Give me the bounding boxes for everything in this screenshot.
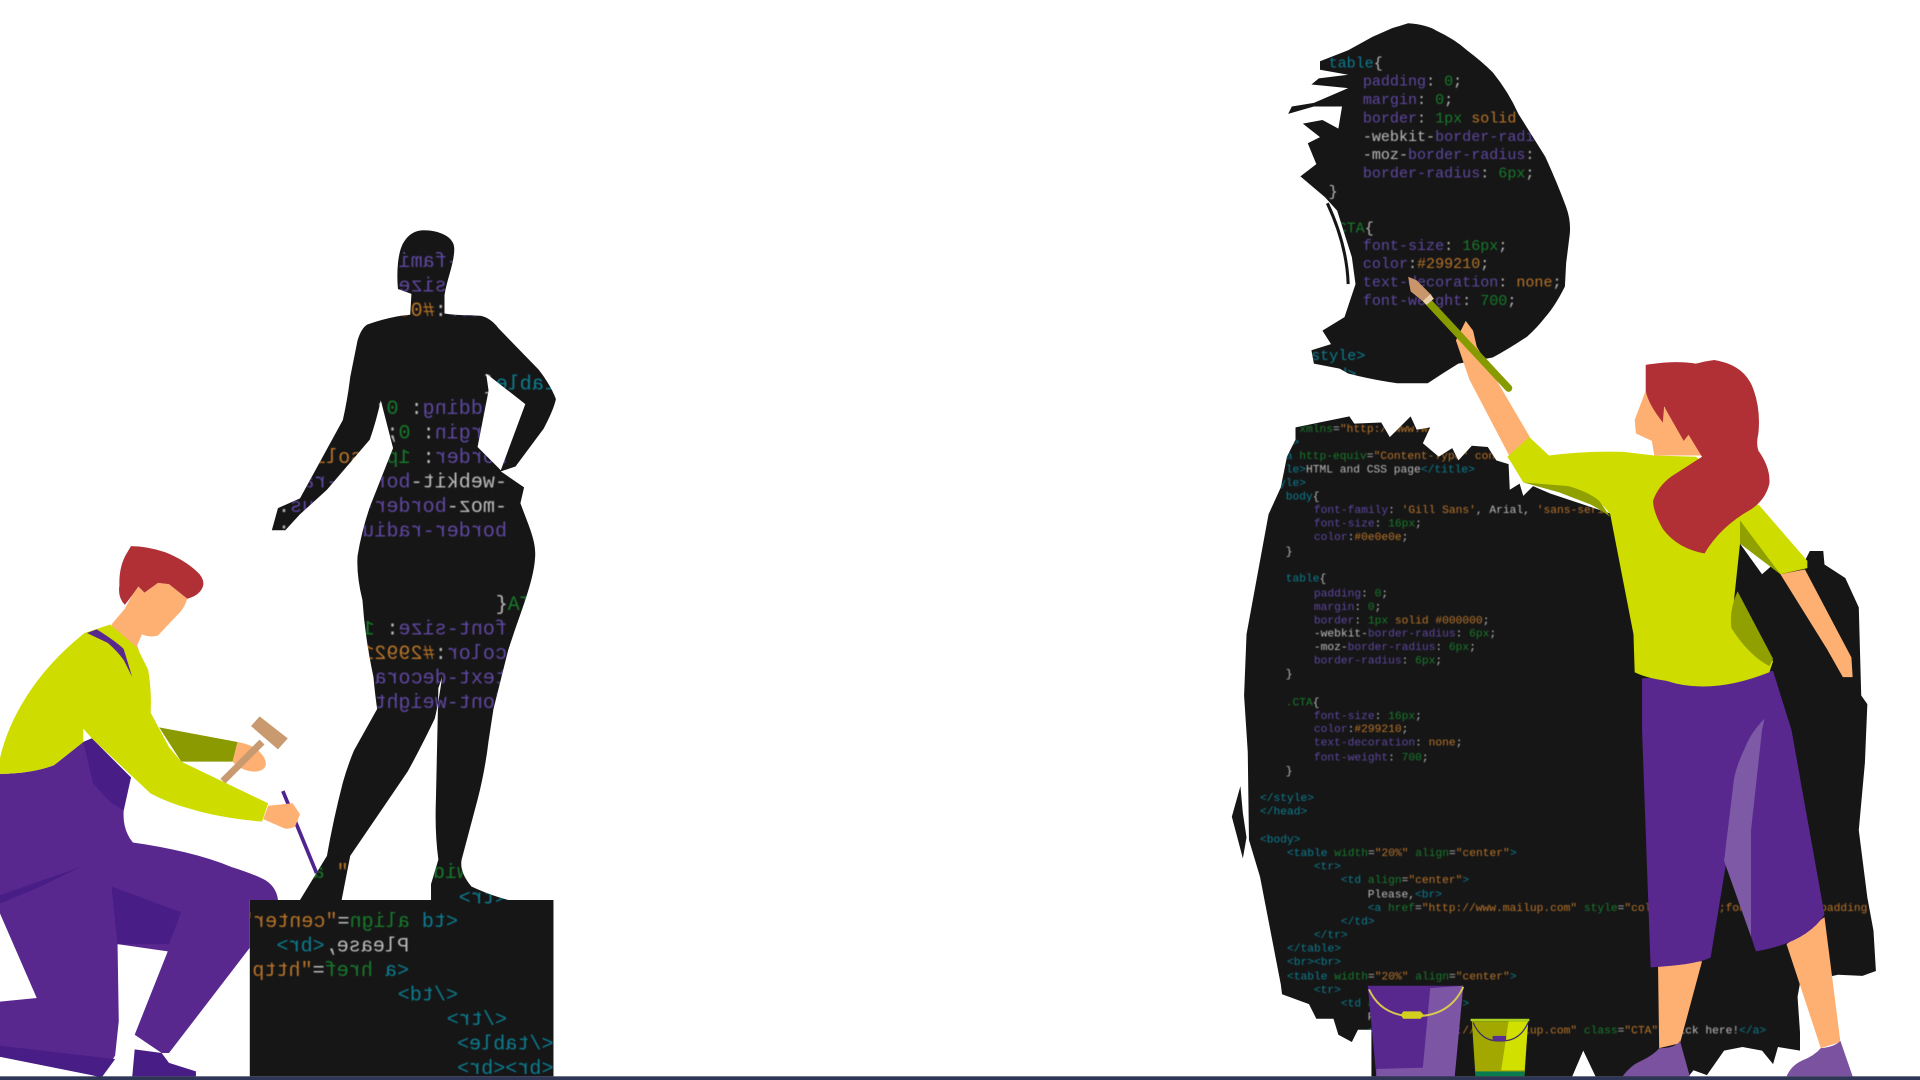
code text in lower paint: <table width="20%" align="center"> — [1287, 848, 1517, 860]
code text in lower paint: <td align="center"> — [1341, 875, 1469, 887]
code text in lower paint: Please,<br> — [1368, 1012, 1442, 1024]
code text in lower paint: } — [1286, 669, 1292, 681]
figure: sculptor man with hammer and chisel — [0, 546, 317, 1078]
code text in lower paint: <a href="http://www.mailup.com" class="CTA">Click here!</a> — [1368, 1025, 1766, 1037]
legs — [1658, 961, 1702, 1048]
mirrored code text on statue and plinth: font-size: 16px; — [314, 275, 507, 298]
neck and face — [111, 583, 187, 671]
code text in upper stroke: </head> — [1293, 365, 1356, 383]
code text in lower paint: <table width="20%" align="center"> — [1287, 972, 1517, 984]
code text in upper stroke: -moz-border-radius: 6px; — [1363, 146, 1580, 164]
lower paint area — [1244, 416, 1876, 1076]
mirrored code text on statue and plinth: text-decoration: none; — [242, 667, 507, 690]
mirrored code text on statue and plinth: font-size: 16px; — [314, 618, 507, 641]
overalls — [0, 738, 278, 1078]
code text in upper stroke: font-size: 16px; — [1363, 237, 1507, 255]
code text in upper stroke: border: 1px solid #000000; — [1363, 109, 1598, 127]
code text in upper stroke: border-radius: 6px; — [1363, 165, 1534, 183]
code text in lower paint: </table> — [1287, 943, 1341, 955]
neck and face — [1635, 391, 1702, 456]
paint drip left — [1232, 786, 1247, 858]
code text in upper stroke: text-decoration: none; — [1363, 274, 1562, 292]
panel: code statue on plinth — [250, 230, 556, 1076]
shoes — [1622, 1041, 1690, 1076]
code text in lower paint: font-size: 16px; — [1314, 711, 1422, 723]
hair — [1646, 360, 1769, 553]
mirrored code text on statue and plinth: .CTA{ — [496, 594, 556, 617]
code text in lower paint: color:#0e0e0e; — [1314, 532, 1408, 544]
shoe — [132, 1049, 196, 1076]
code text in lower paint: table{ — [1286, 574, 1326, 586]
code text in lower paint: <html xmlns="http://www.w3.org/1999/xhtml"> — [1259, 424, 1549, 436]
code text in lower paint: </tr> — [1314, 930, 1348, 942]
mirrored code text on statue and plinth: color:#299210; — [338, 643, 507, 666]
code text in lower paint: body{ — [1286, 492, 1319, 504]
code text in lower paint — [1259, 424, 1920, 1037]
mirrored code text on statue and plinth: <td align="center"> — [229, 911, 458, 934]
code text in lower paint: <title>HTML and CSS page</title> — [1259, 465, 1475, 477]
overalls shading — [0, 738, 181, 1078]
shirt — [1507, 437, 1807, 687]
skirt — [1642, 671, 1824, 967]
code text in lower paint: border: 1px solid #000000; — [1314, 615, 1489, 627]
mirrored code text on statue and plinth: <table width="20%" align="center"> — [144, 862, 553, 885]
hair — [119, 546, 203, 605]
mirrored code text on statue and plinth: border-radius: 6px; — [278, 520, 507, 543]
code text in lower paint: font-family: 'Gill Sans', Arial, 'sans-serif'; — [1314, 505, 1624, 517]
mirrored code text on statue and plinth: table{ — [484, 373, 556, 396]
mirrored code text on statue and plinth: <a href="http://www.mailup.com" — [35, 960, 409, 983]
raised arm — [1456, 321, 1531, 457]
code text in lower paint: -webkit-border-radius: 6px; — [1314, 629, 1496, 641]
icon: paint brush — [1408, 277, 1509, 388]
code text in lower paint: <body> — [1260, 834, 1301, 846]
icon: purple bucket — [1368, 986, 1463, 1076]
code text in lower paint: margin: 0; — [1314, 602, 1381, 614]
code text in upper stroke — [1312, 56, 1559, 376]
back arm — [159, 727, 238, 762]
code text in upper stroke: padding: 0; — [1363, 73, 1462, 91]
mirrored code text on statue and plinth: border: 1px solid #000000; — [194, 447, 507, 470]
code text in upper stroke: } — [1329, 183, 1338, 201]
code text in upper stroke: table{ — [1329, 54, 1383, 72]
mirrored code text on statue and plinth: font-weight: 700; — [302, 692, 507, 715]
icon: lime bucket — [1471, 1019, 1529, 1076]
bottom bar — [0, 1076, 1920, 1080]
icon: hammer — [220, 716, 288, 784]
code text in lower paint: <meta http-equiv="Content-Type" content — [1259, 451, 1522, 463]
mirrored code text on statue and plinth: </td> — [398, 984, 458, 1007]
paint sliver — [1327, 203, 1348, 284]
shirt — [0, 624, 268, 822]
panel: painted code wall — [1232, 23, 1920, 1076]
code text in lower paint: color:#299210; — [1314, 724, 1408, 736]
code text in upper stroke: .CTA{ — [1329, 220, 1374, 238]
code text in lower paint: border-radius: 6px; — [1314, 656, 1442, 668]
figure: painter woman — [1408, 277, 1853, 1076]
mirrored code text on statue and plinth: padding: 0; — [374, 398, 507, 421]
mirrored code text on statue and plinth: color:#0e0e0e; — [338, 300, 507, 323]
code text in lower paint: </style> — [1260, 793, 1314, 805]
code text in lower paint: font-size: 16px; — [1314, 519, 1422, 531]
code text in upper stroke: -webkit-border-radius: 6px; — [1363, 128, 1607, 146]
code text in upper stroke: margin: 0; — [1363, 91, 1453, 109]
code text in lower paint: </head> — [1260, 806, 1308, 818]
shirt shadows — [1523, 482, 1780, 666]
mirrored code text on statue and plinth: -moz-border-radius: 6px; — [218, 496, 507, 519]
code text in upper stroke: font-weight: 700; — [1363, 292, 1516, 310]
code text in lower paint: font-weight: 700; — [1314, 752, 1429, 764]
mirrored code text on statue and plinth: </table> — [457, 1033, 553, 1056]
back hand — [233, 742, 266, 772]
code text in lower paint: Please,<br> — [1368, 890, 1442, 902]
mirrored code text on statue and plinth: margin: 0; — [386, 422, 507, 445]
code text in lower paint: <tr> — [1314, 861, 1341, 873]
mirrored code text on statue and plinth: font-family: 'Gill Sans' — [218, 251, 507, 274]
statue silhouette — [272, 230, 556, 900]
code text in lower paint: -moz-border-radius: 6px; — [1314, 642, 1476, 654]
skirt highlight — [1724, 719, 1764, 937]
code text in lower paint: <br><br> — [1287, 957, 1341, 969]
code text in lower paint: </td> — [1341, 916, 1375, 928]
mirrored code text on statue and plinth: </tr> — [447, 1009, 507, 1032]
code text in upper stroke: color:#299210; — [1363, 255, 1489, 273]
plinth block — [250, 900, 553, 1076]
code text in upper stroke: </style> — [1293, 347, 1365, 365]
mirrored code text on statue and plinth — [250, 251, 553, 1075]
code text in lower paint: } — [1286, 766, 1292, 778]
code text in lower paint: .CTA{ — [1286, 697, 1319, 709]
upper paint stroke — [1288, 23, 1570, 383]
mirrored code text on statue and plinth: Please,<br> — [276, 935, 409, 958]
overall strap — [87, 629, 132, 677]
code text in lower paint: <tr> — [1314, 985, 1341, 997]
code text in lower paint: padding: 0; — [1314, 588, 1388, 600]
code text in lower paint: text-decoration: none; — [1314, 738, 1462, 750]
code text in lower paint: } — [1286, 547, 1292, 559]
chisel — [283, 791, 317, 873]
code text in lower paint: <td align="center"> — [1341, 999, 1469, 1011]
right arm — [1780, 569, 1853, 677]
front hand — [263, 803, 300, 829]
code text in lower paint: <style> — [1259, 478, 1306, 490]
mirrored code text on statue and plinth: -webkit-border-radius: 6px; — [182, 471, 507, 494]
code text in lower paint: <head> — [1259, 438, 1300, 450]
mirrored code text on statue and plinth: <tr> — [459, 888, 507, 911]
code text in lower paint: <a href="http://www.mailup.com" style="color:#299210;font-size:17; padding:20px;">C — [1368, 903, 1920, 915]
